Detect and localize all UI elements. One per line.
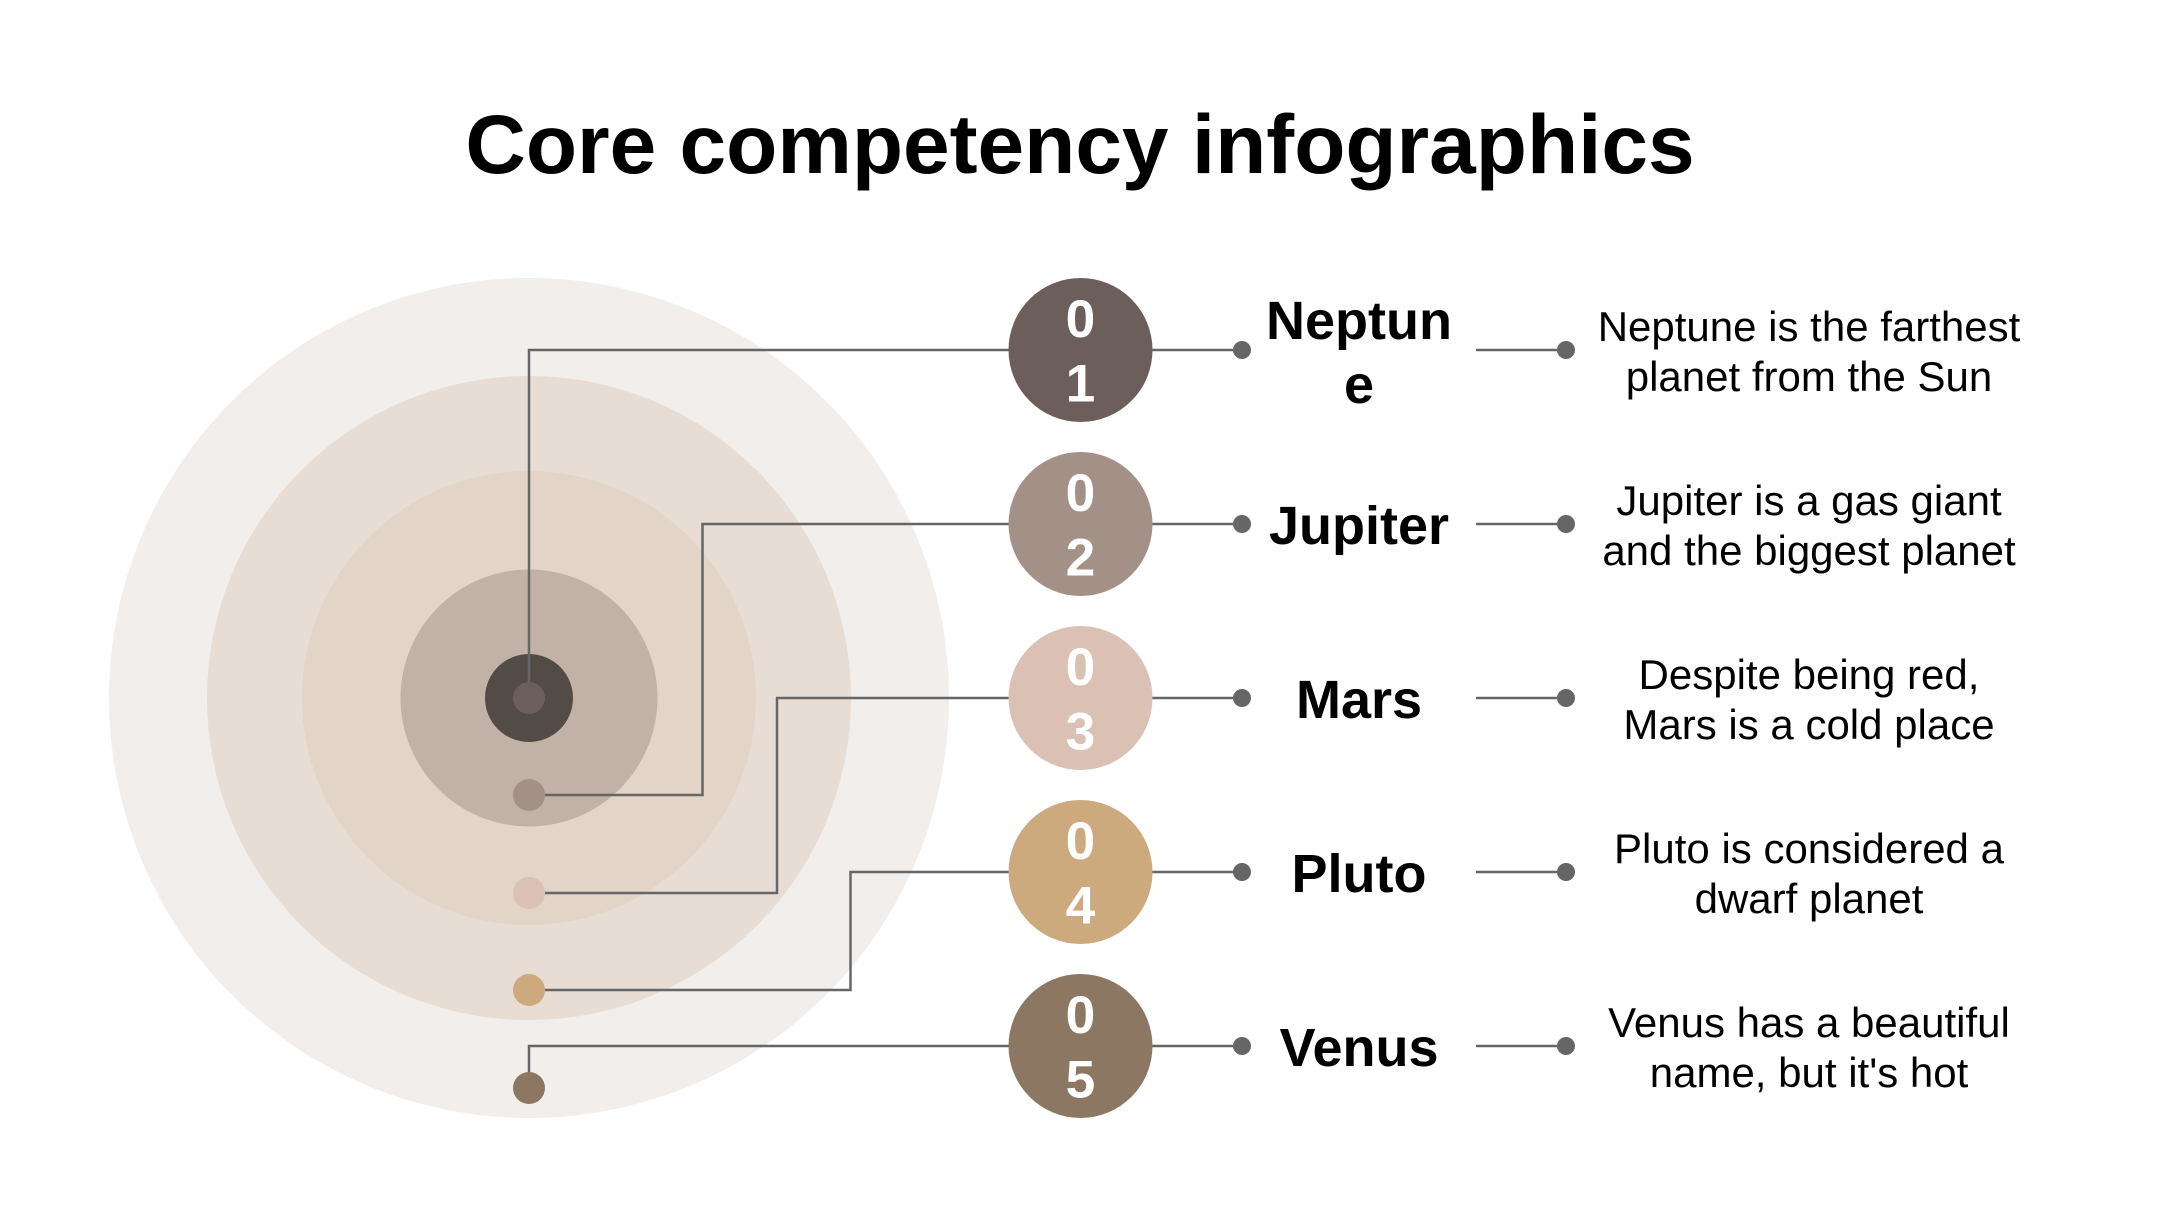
row 3: Mars (1008, 626, 1995, 770)
row 5: Venus: name, but it's hot (1650, 1049, 1969, 1096)
row 1: Neptune: Neptune is the farthest (1598, 303, 2021, 350)
row 1: Neptune: 1 (1066, 354, 1095, 414)
row 5: Venus: 0 (1066, 986, 1095, 1045)
row 4: Pluto: 0 (1066, 812, 1095, 871)
row 3: Mars: Despite being red, (1639, 651, 1979, 698)
row 4: Pluto: Pluto (1292, 844, 1426, 904)
row 2: Jupiter: 2 (1066, 528, 1095, 588)
row 4: Pluto (1008, 800, 2005, 944)
row 5: Venus (1008, 974, 2010, 1118)
row 4: Pluto: dwarf planet (1695, 875, 1924, 922)
row 1: Neptune: e (1344, 355, 1374, 415)
concentric orbit diagram (109, 278, 949, 1118)
row 3: Mars: 0 (1066, 638, 1095, 697)
row 5: Venus: Venus has a beautiful (1608, 999, 2010, 1046)
title: Core competency infographics (465, 97, 1695, 191)
row 3: Mars: 3 (1066, 702, 1095, 762)
row 1: Neptune (1008, 278, 2021, 422)
row 2: Jupiter: 0 (1066, 464, 1095, 523)
row 5: Venus: Venus (1279, 1018, 1439, 1078)
connector lines from planets to numbers (529, 350, 1010, 1088)
row 5: Venus: 5 (1066, 1050, 1095, 1110)
row 1: Neptune: Neptun (1266, 291, 1452, 351)
row 3: Mars: Mars is a cold place (1623, 701, 1995, 748)
planet markers (513, 682, 545, 1104)
row 1: Neptune: planet from the Sun (1626, 353, 1992, 400)
row 2: Jupiter: and the biggest planet (1602, 527, 2016, 574)
row 2: Jupiter: Jupiter (1269, 496, 1449, 556)
row 4: Pluto: 4 (1066, 876, 1096, 936)
row 2: Jupiter: Jupiter is a gas giant (1616, 477, 2002, 524)
row 1: Neptune: 0 (1066, 290, 1095, 349)
row 4: Pluto: Pluto is considered a (1614, 825, 2005, 872)
row 2: Jupiter (1008, 452, 2016, 596)
row 3: Mars: Mars (1296, 670, 1422, 730)
